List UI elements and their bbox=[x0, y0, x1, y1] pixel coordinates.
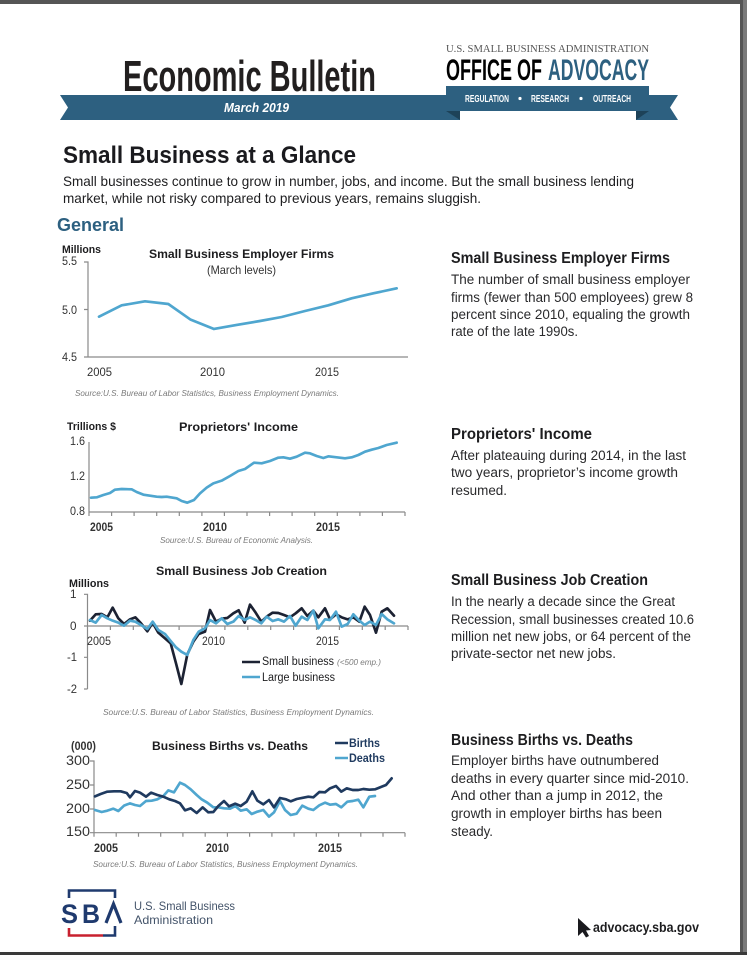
text block: births vs. deaths: growth in employer births has been bbox=[451, 806, 662, 821]
chart: small business job creation: 2010 bbox=[202, 634, 225, 648]
text block: job creation: Small Business Job Creation bbox=[451, 572, 648, 589]
text block: births vs. deaths: Business Births vs. Deaths bbox=[451, 732, 633, 749]
text block: proprietors' income: two years, proprietor’s income growth bbox=[451, 465, 678, 480]
legend: Births bbox=[349, 736, 380, 750]
section heading: general: General bbox=[57, 215, 124, 235]
text block: births vs. deaths bbox=[451, 732, 689, 839]
chart: proprietors' income: 1.2 bbox=[70, 469, 85, 483]
intro text: market, while not risky compared to previous years, remains sluggish. bbox=[63, 190, 481, 206]
chart: business births vs. deaths: 200 bbox=[66, 801, 90, 816]
legend bbox=[335, 736, 385, 765]
SBA logo bbox=[61, 890, 235, 936]
text block: job creation: Recession, small businesses created 10.6 bbox=[451, 612, 694, 627]
office of advocacy logo bbox=[446, 44, 649, 87]
chart: proprietors' income: 2010 bbox=[203, 520, 227, 534]
chart: small business job creation bbox=[67, 564, 408, 717]
office of advocacy logo: U.S. SMALL BUSINESS ADMINISTRATION bbox=[446, 44, 649, 55]
agency name bbox=[134, 899, 235, 927]
title: Economic Bulletin bbox=[123, 52, 376, 101]
text block: births vs. deaths: And other than a jump in 2012, the bbox=[451, 788, 663, 803]
chart: small business employer firms: Small Business Employer Firms bbox=[149, 247, 334, 261]
SBA logo: B bbox=[82, 899, 100, 929]
chart: proprietors' income: 0.8 bbox=[70, 504, 85, 518]
chart: proprietors' income: Proprietors' Income bbox=[179, 420, 298, 434]
chart: small business job creation: Source:U.S. Bureau of Labor Statistics, Business Employment Dynamics. bbox=[103, 707, 374, 717]
chart: business births vs. deaths: 2005 bbox=[94, 841, 118, 855]
intro text: Small businesses continue to grow in number, jobs, and income. But the small business lending bbox=[63, 173, 634, 189]
chart: business births vs. deaths: 300 bbox=[66, 753, 90, 768]
chart: business births vs. deaths bbox=[66, 736, 405, 869]
chart: small business job creation: 2005 bbox=[87, 634, 111, 648]
chart: proprietors' income: 1.6 bbox=[70, 434, 85, 448]
text block: job creation: In the nearly a decade since the Great bbox=[451, 594, 675, 609]
chart: small business job creation: -2 bbox=[67, 682, 77, 696]
legend: Large business bbox=[262, 672, 335, 684]
legend bbox=[242, 656, 381, 684]
agency name: U.S. Small Business bbox=[134, 899, 235, 913]
office of advocacy logo: ADVOCACY bbox=[548, 54, 649, 87]
chart: business births vs. deaths: Business Births vs. Deaths bbox=[152, 739, 308, 753]
chart: small business employer firms: 4.5 bbox=[62, 350, 77, 364]
header banner bbox=[60, 86, 678, 120]
chart: small business job creation: Millions bbox=[69, 578, 109, 590]
heading: Small Business at a Glance bbox=[63, 142, 356, 169]
tagline: OUTREACH bbox=[593, 93, 631, 105]
text block: employer firms: Small Business Employer Firms bbox=[451, 250, 670, 267]
chart: business births vs. deaths: 150 bbox=[66, 824, 90, 839]
legend: Small business bbox=[262, 656, 334, 668]
text block: employer firms: The number of small business employer bbox=[451, 272, 690, 287]
text block: employer firms: percent since 2010, equaling the growth bbox=[451, 307, 690, 322]
text block: proprietors' income: Proprietors' Income bbox=[451, 426, 592, 443]
text block: births vs. deaths: steady. bbox=[451, 824, 493, 839]
text block: births vs. deaths: deaths in every quarter since mid-2010. bbox=[451, 771, 689, 786]
legend: Deaths bbox=[349, 751, 385, 765]
text block: employer firms bbox=[451, 250, 693, 339]
chart: small business employer firms: Source:U.S. Bureau of Labor Statistics, Business Employment Dynamics. bbox=[75, 388, 339, 398]
text block: job creation: private-sector net new jobs. bbox=[451, 646, 616, 661]
chart: small business employer firms: 5.0 bbox=[62, 303, 77, 317]
text block: job creation bbox=[451, 572, 694, 661]
chart: proprietors' income bbox=[67, 420, 405, 545]
chart: proprietors' income: 2005 bbox=[90, 520, 113, 534]
chart: small business employer firms: 2015 bbox=[315, 365, 339, 379]
tagline bbox=[465, 93, 631, 105]
chart: proprietors' income: 2015 bbox=[316, 520, 340, 534]
chart: business births vs. deaths: 250 bbox=[66, 777, 90, 792]
text block: births vs. deaths: Employer births have outnumbered bbox=[451, 753, 659, 768]
chart: small business employer firms: 2010 bbox=[200, 365, 225, 379]
website link with cursor icon bbox=[578, 918, 699, 938]
text block: employer firms: firms (fewer than 500 employees) grew 8 bbox=[451, 290, 693, 305]
chart: small business job creation: 0 bbox=[70, 619, 77, 633]
chart: business births vs. deaths: 2015 bbox=[318, 841, 342, 855]
chart: business births vs. deaths: 2010 bbox=[206, 841, 229, 855]
chart: small business job creation: -1 bbox=[67, 650, 77, 664]
chart: small business employer firms: Millions bbox=[62, 244, 101, 256]
chart: small business job creation: 2015 bbox=[316, 634, 339, 648]
text block: employer firms: rate of the late 1990s. bbox=[451, 324, 578, 339]
chart: proprietors' income: Trillions $ bbox=[67, 421, 116, 433]
tagline: REGULATION bbox=[465, 93, 509, 105]
chart: small business employer firms: 5.5 bbox=[62, 254, 77, 268]
office of advocacy logo: OFFICE OF bbox=[446, 54, 542, 87]
text block: job creation: million net new jobs, or 64 percent of the bbox=[451, 629, 691, 644]
legend: (<500 emp.) bbox=[337, 657, 381, 667]
date: March 2019 bbox=[224, 101, 289, 115]
text block: proprietors' income: After plateauing during 2014, in the last bbox=[451, 448, 686, 463]
chart: business births vs. deaths: (000) bbox=[71, 739, 96, 753]
chart: proprietors' income: Source:U.S. Bureau of Economic Analysis. bbox=[160, 535, 313, 545]
text block: proprietors' income: resumed. bbox=[451, 483, 507, 498]
SBA logo: S bbox=[61, 899, 78, 929]
tagline: RESEARCH bbox=[531, 93, 569, 105]
chart: small business employer firms: 2005 bbox=[87, 365, 112, 379]
chart: small business employer firms: (March levels) bbox=[207, 263, 276, 277]
chart: business births vs. deaths: Source:U.S. Bureau of Labor Statistics, Business Employment Dynamics. bbox=[93, 859, 358, 869]
chart: small business job creation: 1 bbox=[70, 587, 77, 601]
intro text bbox=[63, 173, 634, 206]
chart: small business employer firms bbox=[62, 244, 408, 398]
chart: small business job creation: Small Business Job Creation bbox=[156, 564, 327, 578]
text block: proprietors' income bbox=[451, 426, 686, 498]
agency name: Administration bbox=[134, 913, 213, 927]
website link with cursor icon: advocacy.sba.gov bbox=[593, 920, 699, 935]
